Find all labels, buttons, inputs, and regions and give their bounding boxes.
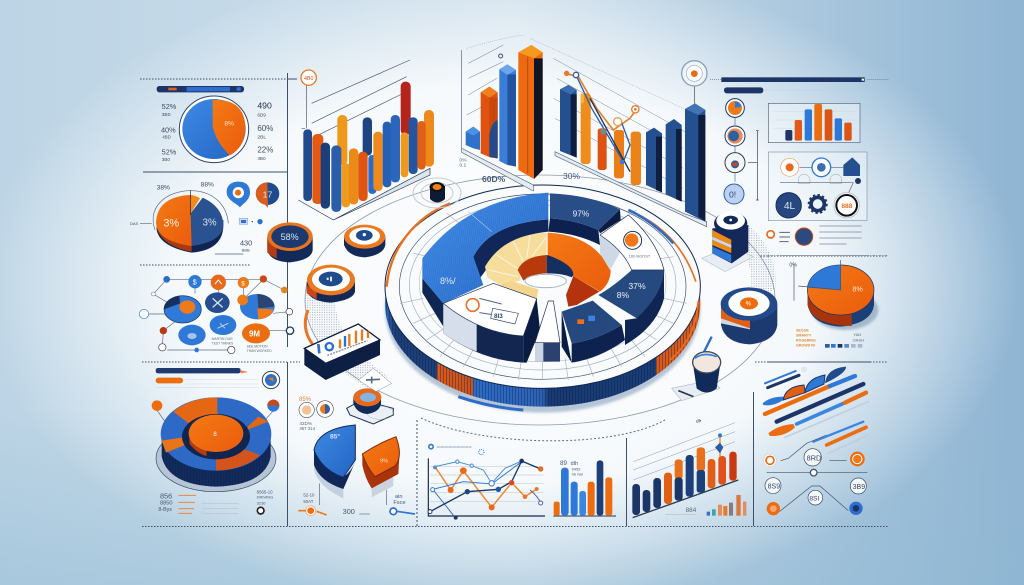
labels: 88% [201,182,214,189]
right coin [721,287,777,344]
mini bar chart [768,103,860,143]
cylinder bar chart: 4B0 [304,76,314,82]
centre sliver [535,301,560,362]
network diagram [139,275,294,354]
captions: SEE MOTION [247,345,268,349]
column chart: dth [571,461,578,467]
badge [262,371,280,389]
axes [428,458,545,516]
white upper-right segment: 100 BOOST [629,253,651,258]
donut [156,397,276,492]
labels: 430 [240,239,252,248]
section dividers [140,73,888,526]
stat card [304,324,380,380]
lower discs: 9M [249,329,260,338]
orange wedge: 9% [380,459,388,465]
inner hub [518,255,575,288]
right pie panel: SMARTY [796,334,812,338]
labels: 38% [157,184,170,191]
slanted bar chart [632,419,746,518]
pie [153,190,228,253]
legend: 8565-10 [257,490,273,495]
legend: 8-Bys [158,507,172,513]
right navy segment: 8% [617,290,629,300]
donut: 8 [213,432,217,438]
badges: 367 314 [299,426,316,431]
pin icons: 17 [263,189,272,199]
legend: 3230 [257,501,266,506]
badges: 42D% [299,421,312,426]
target icon [682,61,707,103]
labels: 0.1 [459,162,466,168]
nodes: $ [241,281,245,287]
left oval [164,296,201,323]
stat labels: 22% [257,145,273,154]
large outer ring [305,175,776,441]
top-left pie panel [157,86,273,163]
stat labels [161,100,273,162]
connector diagram: 8S9 [768,484,780,491]
icon panel: 888 [841,203,853,210]
labels [459,158,467,168]
X disc [205,292,230,313]
cream segment [485,233,547,299]
coin: target [344,225,385,257]
stat labels: 3B0 [162,157,170,162]
legend: 856 [160,492,172,501]
series [428,449,543,520]
bars [303,82,434,212]
captions: MARTIN OUR [212,337,233,341]
navy upper segment [548,193,621,245]
pie: 8% [224,121,234,128]
coin on plate [347,368,393,424]
right pie panel: YAD [853,332,861,337]
captions: THAN WORKED [247,349,272,353]
right pie panel: SEGUE [796,329,809,333]
legend: DRIVING [257,494,273,499]
orange segment [548,233,611,307]
coin stack [702,212,753,272]
captions: TEST THINKS [212,341,234,345]
stat labels: 60% [257,124,273,133]
stat labels: 40% [161,125,176,134]
connector diagram: 3B9 [853,484,865,491]
header bars [710,77,888,93]
icon column: 0! [729,189,736,199]
connector diagram [764,435,867,515]
labels [130,182,252,254]
label: centre top percentages [482,171,580,184]
captions: ain [395,494,403,500]
captions [298,483,415,516]
blue wedge: 85° [330,432,340,440]
labels: BBB [242,248,250,253]
label: centre top percentages: 30% [563,171,580,181]
legend row [767,226,862,245]
stat labels: 4BD [162,135,171,140]
captions: Fsce [393,500,406,506]
captions: 52-10 [303,493,315,498]
navy lower segment [562,301,625,363]
box bar chart: left [459,35,543,191]
connector diagram: 8RD [807,453,821,462]
platform [530,38,707,227]
cup icon with pad [672,352,721,401]
right coin: % [746,302,752,308]
stat labels: 490 [257,100,272,110]
right navy segment [598,270,664,345]
platform [462,35,533,191]
stat labels: 6D9 [257,113,266,118]
legend [158,490,273,514]
stat labels: 3B0 [162,112,171,118]
stat labels: 2BL [257,135,266,141]
connector diagram: 8SI [809,496,819,503]
right pie panel: ROGERING [796,339,816,343]
stat labels: 3B0 [257,156,266,161]
labels: 0% [459,158,467,164]
icon: top cap [413,178,461,208]
header bar [157,86,244,92]
axis frame [301,60,410,137]
white segment [443,283,540,363]
title bars [156,368,258,388]
trend lines [564,71,639,172]
pins [152,400,279,422]
caption [428,444,472,450]
grid rings [387,194,712,410]
white segment: 8I3 [494,313,503,320]
right pie panel [768,256,888,348]
right pie panel: OASH [853,337,864,342]
column chart: 89 [560,460,568,467]
main donut chart [385,185,712,413]
column chart: 9452 [572,467,581,472]
right oval [237,294,275,319]
platform [298,168,430,220]
lower discs [178,315,270,345]
blue segment: 8%/ [440,276,456,286]
blue segment [422,193,548,327]
bars [560,85,705,222]
legend: 8850 [160,501,173,507]
cylinder bar chart [298,60,434,220]
second pie panel [130,182,279,254]
coin: chart [307,265,355,303]
navy upper segment: 97% [573,209,590,219]
icon panel [768,152,867,221]
icon column [724,99,759,204]
coin: 58%: 58% [281,232,299,242]
top-right panel [710,77,888,245]
column chart: hb hat [572,472,584,477]
right navy segment: 37% [628,281,646,291]
label: centre top percentages: 60D% [482,174,506,184]
icon panel: 4L [784,201,796,212]
box bar chart: right [530,38,707,227]
captions: 50AT [303,499,314,504]
nodes [139,275,294,354]
pen strokes [763,366,868,453]
right pie panel: 0% [789,263,797,269]
bottom-left donut panel [152,368,280,514]
stat labels: 52% [162,147,177,156]
badges [299,397,333,431]
connectors [144,279,289,350]
coin: 58% [267,222,313,262]
slanted bar chart: 884 [686,507,697,514]
labels: DAS [130,221,139,226]
pin icons [227,182,279,224]
captions: 300 [343,507,355,516]
line chart [428,444,545,520]
bars [466,45,543,179]
right pie panel: GROWS RI [796,344,815,348]
white upper-right segment [600,215,664,270]
nodes: $ [193,278,197,287]
wedge charts [298,397,415,516]
platform band [385,185,700,413]
badges: 85% [299,397,312,403]
stat labels: 52% [162,102,177,111]
slanted bar chart: dl• [696,419,702,424]
right pie panel: 8% [852,284,863,293]
captions [212,337,272,353]
pie: 3% [163,218,179,230]
column chart [553,460,616,516]
pie: 3% [203,218,217,229]
